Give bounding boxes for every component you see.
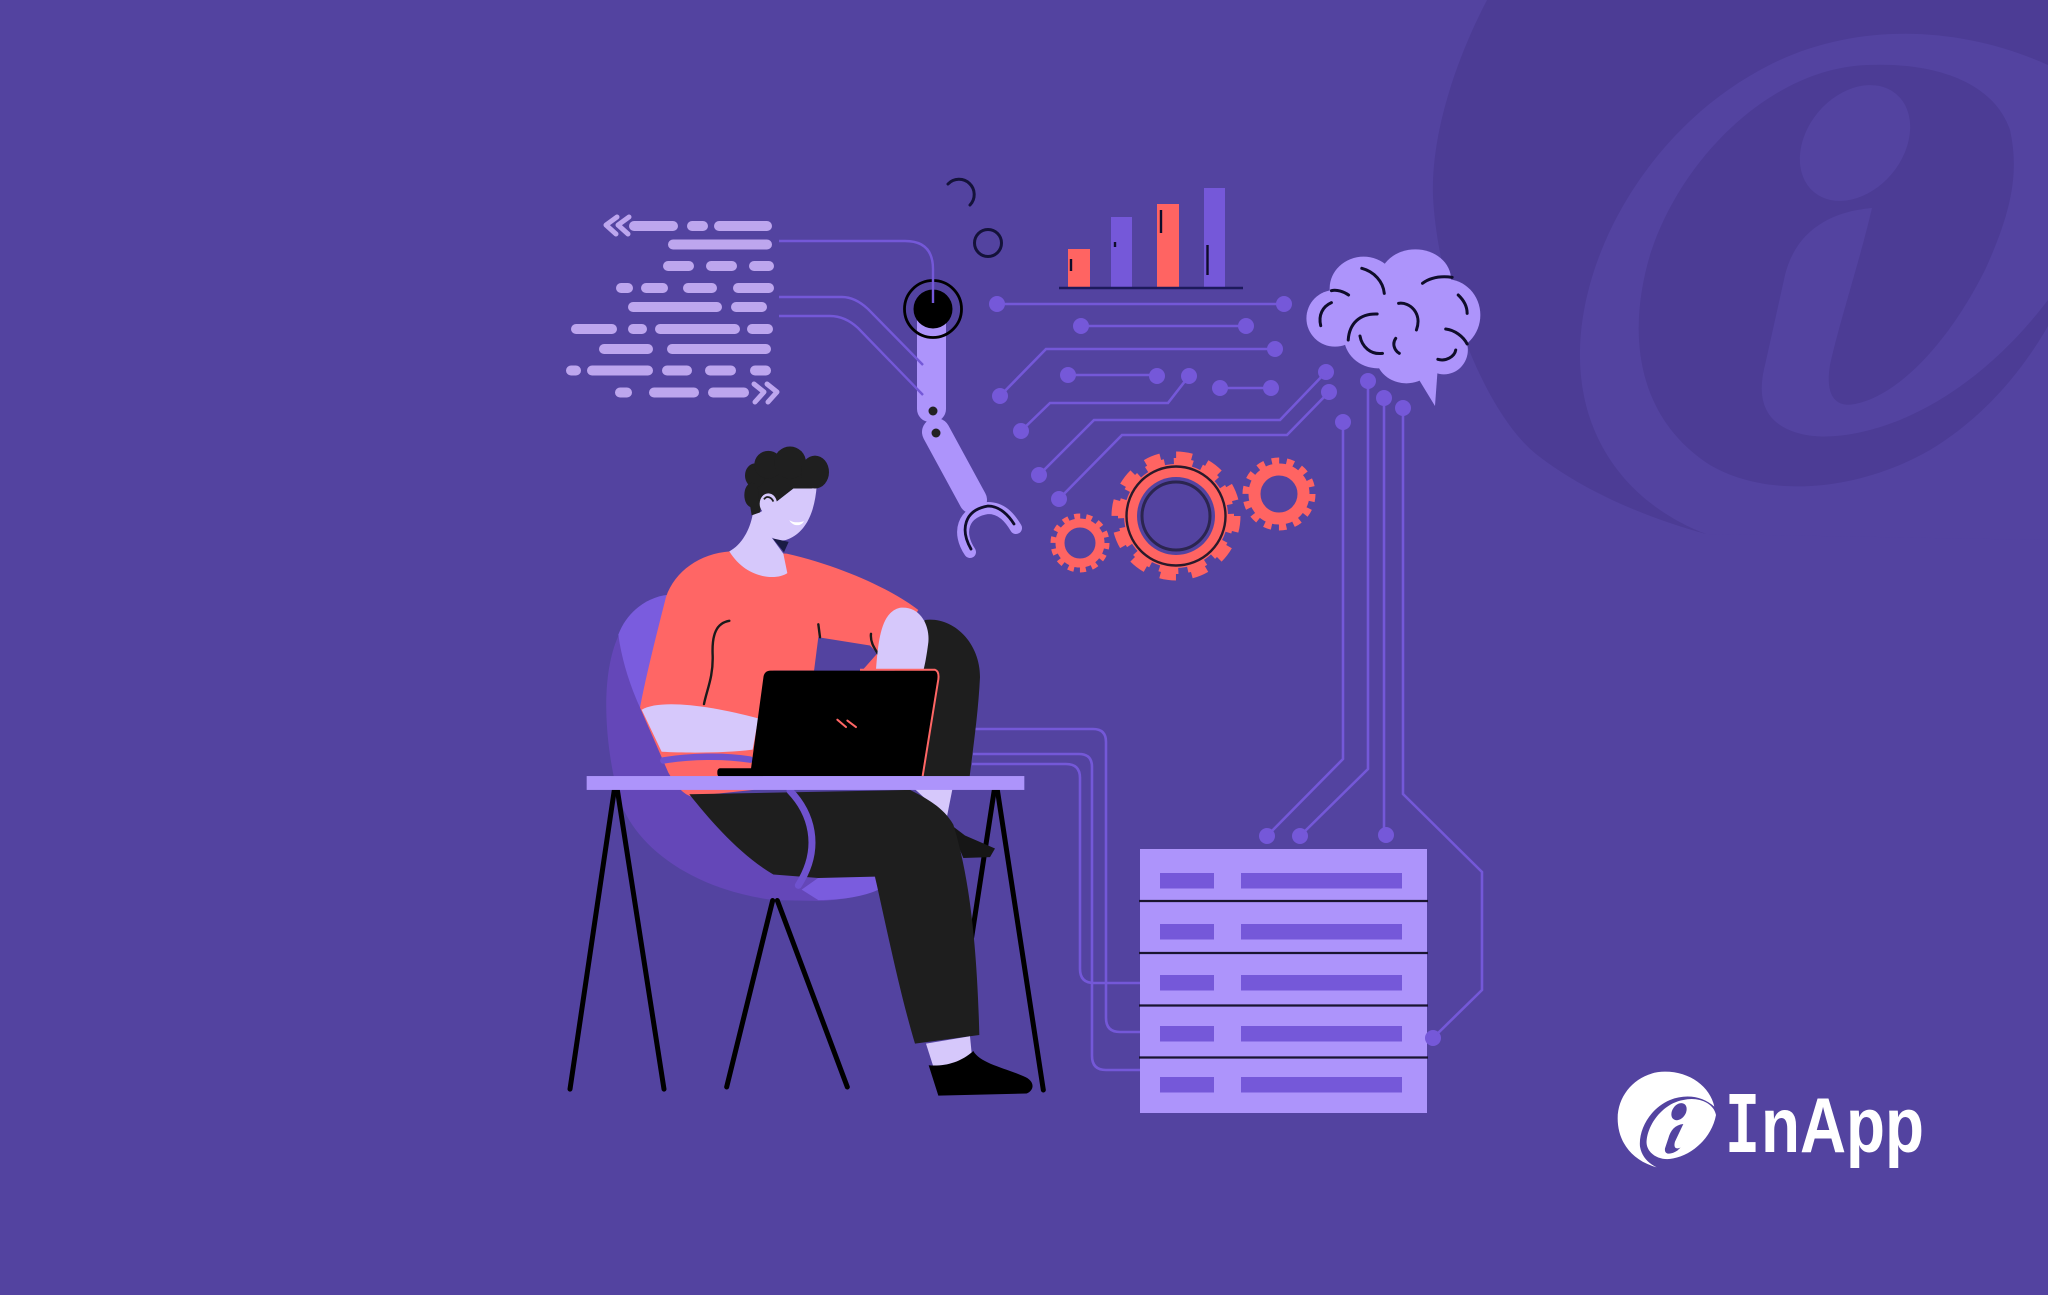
large gear [1116,456,1236,576]
circuit nodes [989,296,1337,507]
gears [1054,456,1312,576]
shirt wrinkles [704,621,878,704]
smile [789,520,804,525]
hand on knee [876,608,929,671]
chair [606,595,880,901]
person at desk [570,446,1043,1096]
left gear [1054,517,1106,569]
traces from brain to server [1267,381,1482,1038]
neck and face [729,486,817,577]
InApp logo [1618,1072,1924,1179]
trousers [689,790,979,1044]
cables from laptop to server [972,729,1140,1070]
raised knee [893,620,980,779]
arm [642,704,758,753]
server stack [1139,849,1441,1113]
shirt [640,551,918,796]
right gear [1246,462,1312,526]
back leg and foot [913,788,995,858]
logo wordmark: nApp [1761,1081,1924,1169]
neck shadow [773,538,789,552]
trace nodes [1259,373,1411,844]
hair [744,446,829,515]
watermark: large InApp logo mark [1433,0,2048,540]
brain [1306,249,1480,406]
desk top [587,776,1024,790]
logo mark [1618,1072,1716,1167]
chair arm bands [663,757,812,885]
bar chart [1059,188,1243,288]
circuit traces [997,304,1329,499]
connector lines from code to robot arm [779,241,933,395]
decorative arc and ring [948,179,1002,256]
code lines panel [566,217,777,402]
sock [926,1036,972,1067]
shoe [929,1051,1033,1096]
robot arm [904,280,1016,552]
laptop [717,670,939,777]
logo wordmark: I [1725,1080,1760,1179]
desk and chair legs [570,790,1043,1090]
gap between arm and torso [814,637,877,671]
ear [760,493,777,514]
